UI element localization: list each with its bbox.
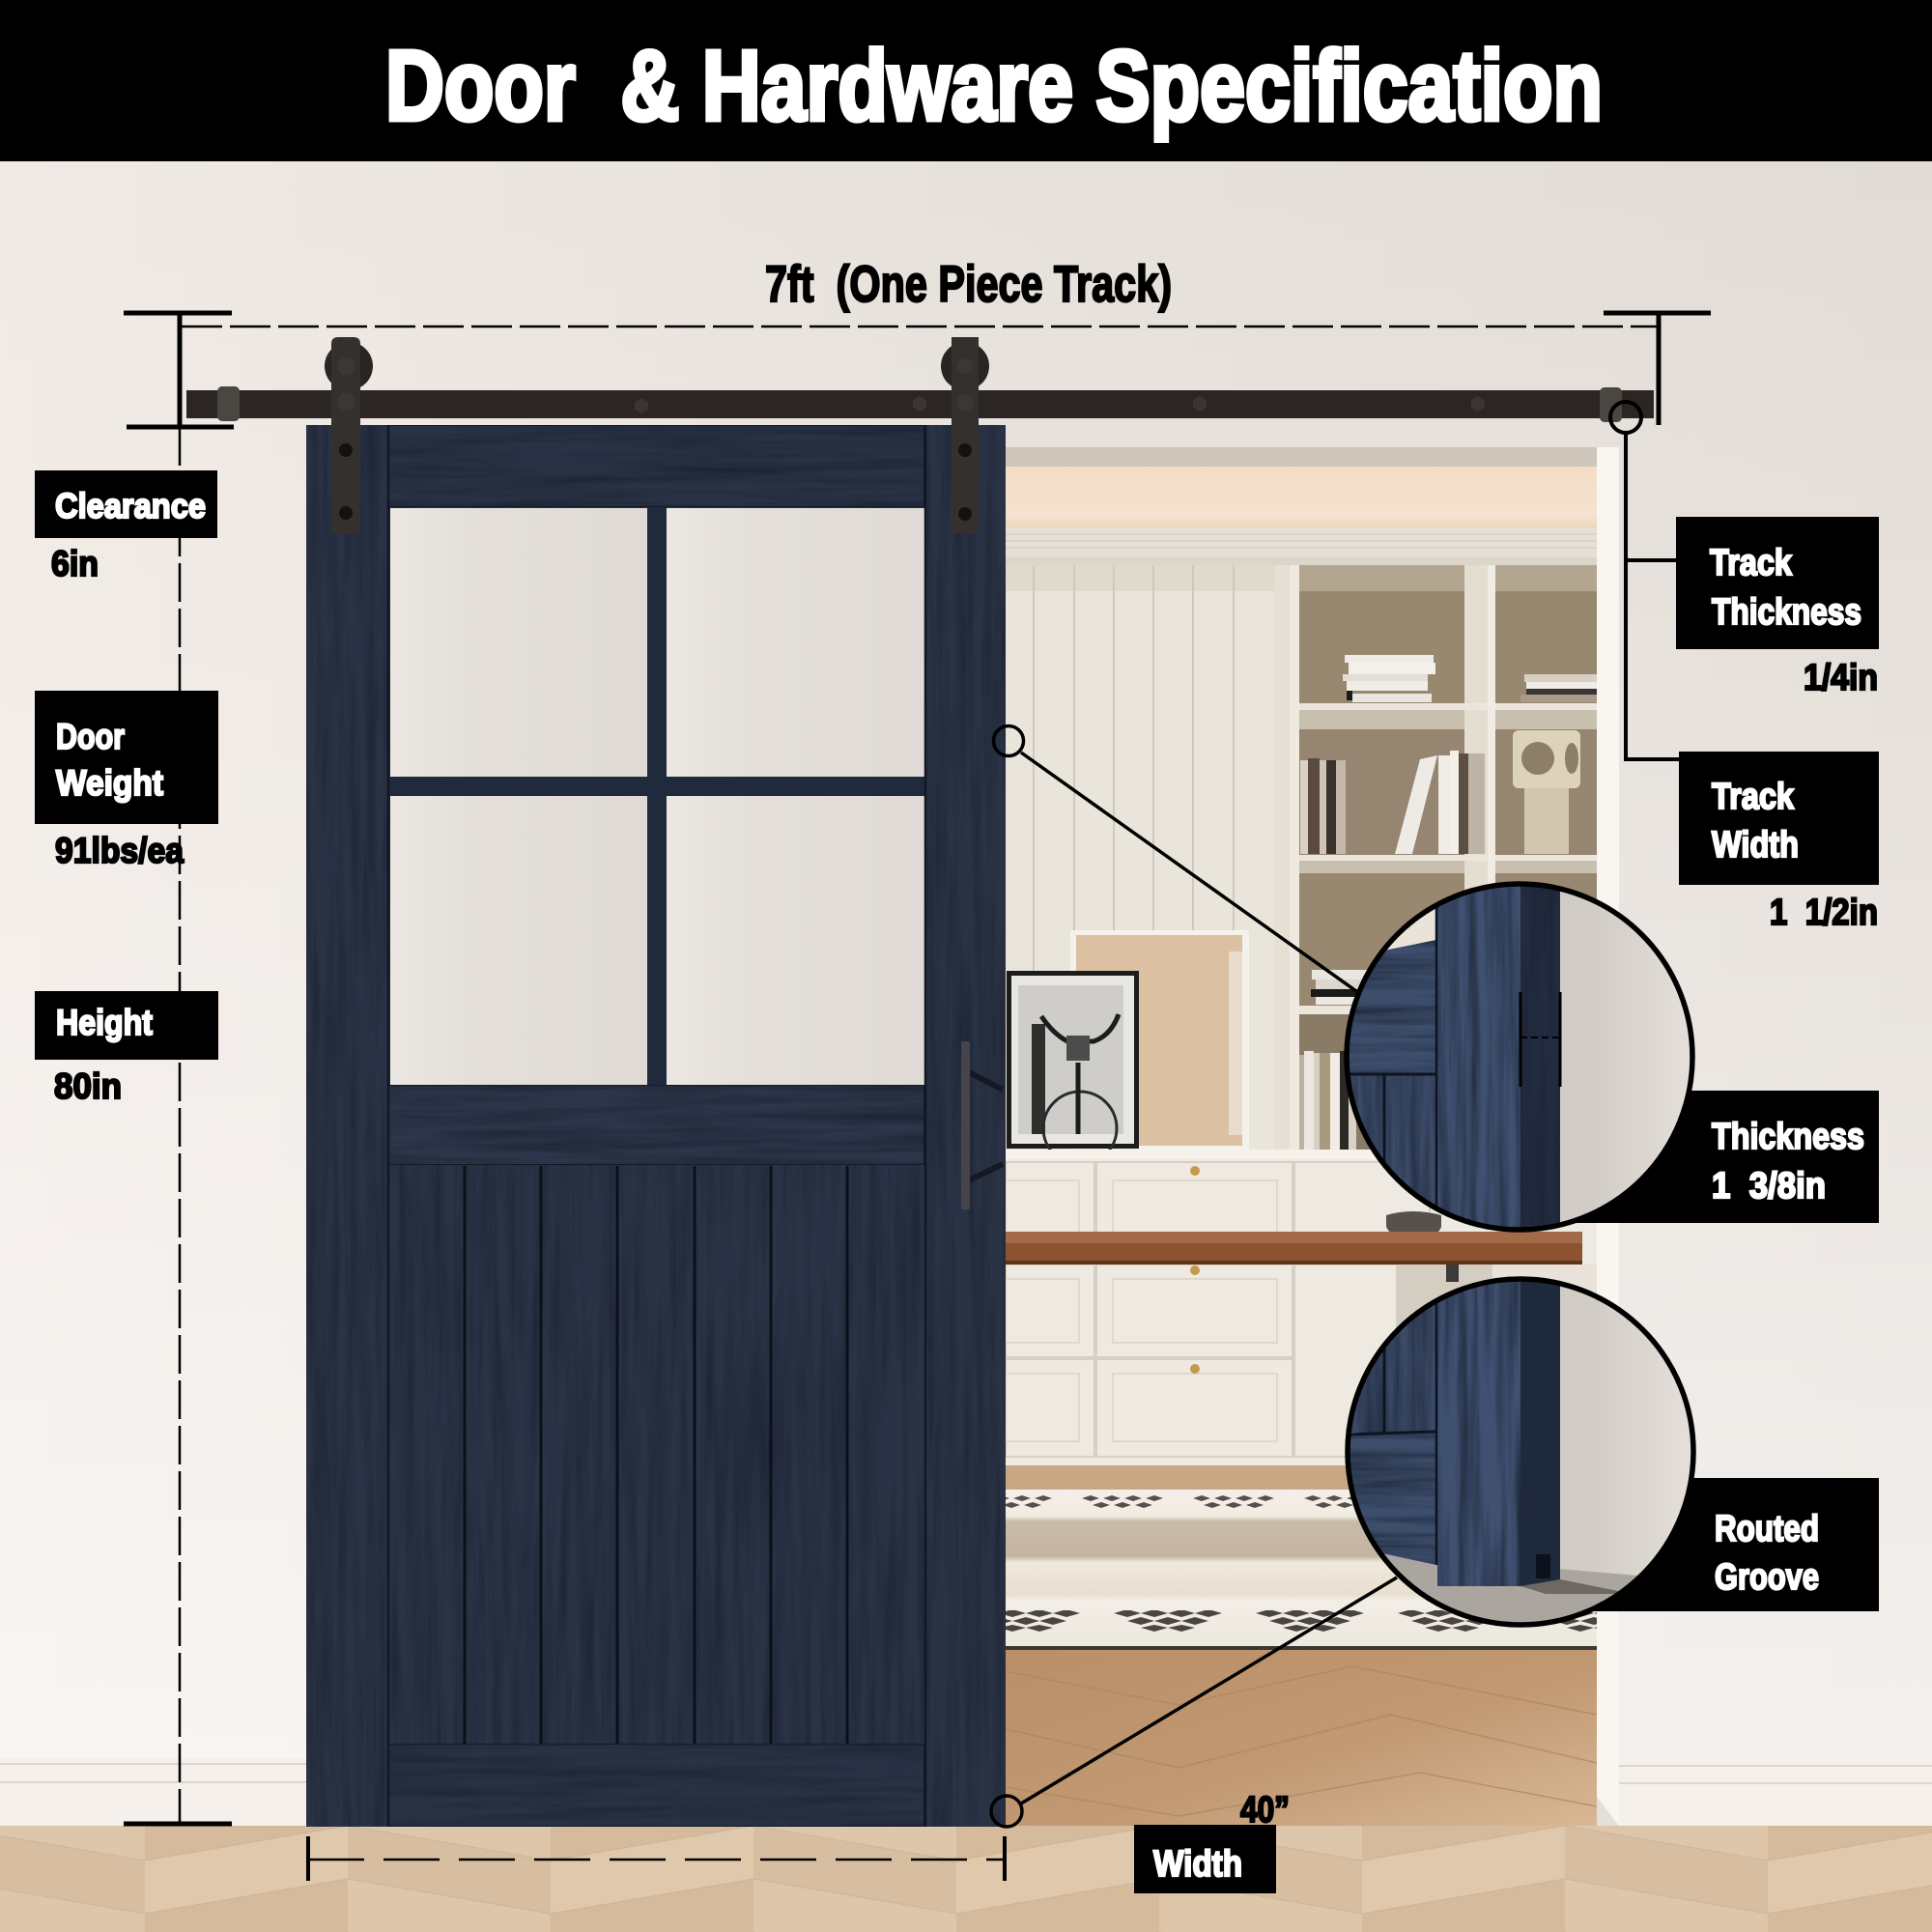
routed groove label: Routed: [1715, 1509, 1819, 1549]
room seen through doorway: [1006, 447, 1597, 1826]
bowl: [1386, 1211, 1441, 1232]
height label: Height: [56, 1003, 153, 1042]
door frame trim: [1006, 418, 1624, 1826]
width label: [1134, 1790, 1290, 1893]
height label: [35, 991, 218, 1106]
door slab: [306, 425, 1006, 1827]
lower shelf books: [1299, 970, 1367, 1150]
track thickness label: 1/4in: [1804, 658, 1878, 698]
bottom rail: [388, 1744, 924, 1827]
track width label: Track: [1712, 777, 1795, 817]
right baseboard: [1619, 1760, 1932, 1826]
stacked books: [1343, 655, 1597, 702]
cabinets: [1006, 1150, 1597, 1465]
detail circle: routed groove: [1345, 1276, 1696, 1628]
track thickness label: [1676, 517, 1879, 698]
lower callout marker and leader: [991, 1577, 1397, 1827]
vertical planks: [465, 1166, 847, 1744]
lock rail: [388, 1085, 924, 1165]
clearance label: 6in: [51, 544, 99, 583]
track length dimension: [182, 313, 1711, 425]
sculpture: [1513, 730, 1580, 854]
thickness label: Thickness: [1712, 1117, 1864, 1157]
wooden table: [1006, 1232, 1582, 1264]
floor: [0, 1826, 1932, 1932]
door weight label: Weight: [56, 763, 163, 803]
width dimension: [308, 1836, 1005, 1881]
right hanger: [941, 337, 989, 533]
thickness label: 1 3/8in: [1712, 1166, 1826, 1207]
door weight label: [35, 691, 218, 870]
track width label: [1679, 752, 1879, 933]
barn door: [306, 425, 1006, 1827]
track length label: 7ft (One Piece Track): [765, 256, 1172, 313]
framed bicycle photo: [1007, 971, 1139, 1165]
muntins: [388, 507, 924, 1085]
clearance label: Clearance: [55, 486, 206, 526]
width label: Width: [1153, 1844, 1242, 1885]
routed groove label: [1584, 1478, 1879, 1611]
track rail: [186, 386, 1654, 422]
clearance label: [35, 470, 217, 583]
top rail: [388, 425, 924, 507]
panelled wall: [1006, 565, 1286, 1169]
door weight label: 91lbs/ea: [55, 831, 184, 870]
left baseboard: [0, 1758, 306, 1826]
left hanger: [325, 337, 373, 533]
track thickness label: Track: [1710, 543, 1793, 583]
title bar: [0, 0, 1932, 161]
glass panes: [390, 508, 924, 1085]
thickness label: [1565, 1091, 1879, 1223]
track width label: 1 1/2in: [1770, 893, 1878, 933]
width label: 40”: [1240, 1790, 1290, 1831]
room floor: [1006, 1465, 1597, 1826]
track thickness label: Thickness: [1712, 592, 1861, 633]
crown moulding: [1006, 527, 1597, 565]
routed groove label: Groove: [1715, 1557, 1819, 1598]
pull handle: [961, 1041, 1003, 1209]
door weight label: Door: [56, 717, 125, 756]
patterned rug: [1006, 1490, 1597, 1650]
upright books: [1300, 751, 1485, 854]
title bar: Door & Hardware Specification: [385, 30, 1603, 141]
upper callout marker and leader: [993, 726, 1356, 991]
track callout lines: [1610, 402, 1679, 759]
bookcase: [1274, 565, 1597, 1169]
height label: 80in: [54, 1066, 122, 1106]
art print: [1070, 930, 1249, 1150]
track width label: Width: [1712, 825, 1799, 866]
detail circle: door thickness: [1343, 879, 1700, 1239]
height dimension: [124, 313, 234, 1824]
